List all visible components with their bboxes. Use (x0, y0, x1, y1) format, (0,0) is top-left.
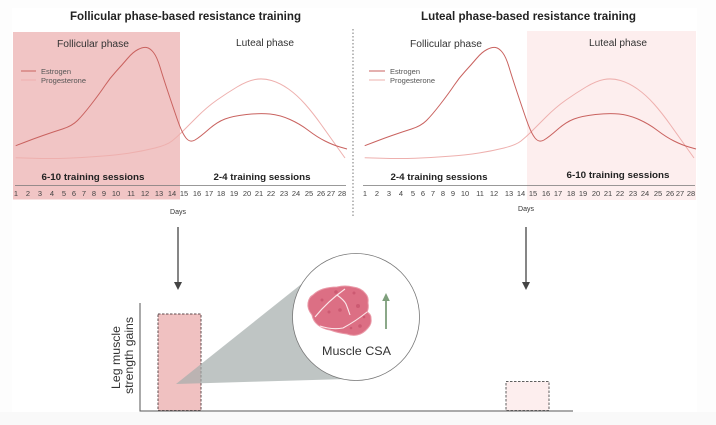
legend (21, 67, 86, 85)
day numbers: 4 (50, 189, 54, 198)
sessions label: 6-10: 6-10 training sessions (566, 170, 670, 181)
progesterone curve (365, 79, 694, 158)
day numbers: 25 (305, 189, 313, 198)
legend (369, 67, 435, 85)
day numbers: 19 (230, 189, 238, 198)
day numbers: 11 (127, 189, 135, 198)
day numbers: 15 (529, 189, 537, 198)
day numbers: 12 (490, 189, 498, 198)
day numbers: 9 (102, 189, 106, 198)
callout label: Muscle CSA (322, 344, 391, 358)
day numbers: 10 (461, 189, 469, 198)
day numbers: 24 (641, 189, 649, 198)
day numbers: 27 (327, 189, 335, 198)
day numbers: 24 (292, 189, 300, 198)
day numbers: 17 (205, 189, 213, 198)
panel divider (352, 29, 354, 218)
sessions label: 2-4: 2-4 training sessions (214, 172, 310, 183)
icon: up arrow (382, 293, 390, 329)
days axis label: Days (518, 206, 534, 213)
day numbers: 3 (38, 189, 42, 198)
day numbers: 8 (92, 189, 96, 198)
sessions label: 6-10: 6-10 training sessions (42, 172, 144, 183)
highlighted luteal phase band (527, 31, 696, 200)
day axis line (363, 184, 695, 186)
day numbers: 20 (243, 189, 251, 198)
sessions label: 2-4: 2-4 training sessions (390, 172, 488, 183)
day numbers: 6 (72, 189, 76, 198)
day numbers: 21 (255, 189, 263, 198)
bar chart: leg muscle strength gains (109, 303, 573, 411)
legend: Progesterone (390, 76, 435, 85)
estrogen curve (16, 47, 347, 149)
day numbers: 20 (592, 189, 600, 198)
phase label: follicular: Follicular phase (410, 39, 482, 50)
day numbers: 1 (14, 189, 18, 198)
day numbers: 25 (654, 189, 662, 198)
day numbers: 10 (112, 189, 120, 198)
days axis label: Days (170, 209, 186, 216)
axes (140, 303, 573, 411)
day numbers: 5 (62, 189, 66, 198)
bar: luteal (506, 382, 549, 410)
panel: follicular phase-based training (13, 9, 347, 216)
day numbers: 22 (267, 189, 275, 198)
day numbers: 19 (579, 189, 587, 198)
day numbers: 18 (567, 189, 575, 198)
day axis line (15, 184, 346, 186)
day numbers: 28 (687, 189, 695, 198)
day numbers: 1 (363, 189, 367, 198)
phase label: luteal: Luteal phase (236, 38, 294, 49)
panel: luteal phase-based training (363, 9, 696, 213)
day numbers: 16 (542, 189, 550, 198)
day numbers: 2 (26, 189, 30, 198)
day numbers: 8 (441, 189, 445, 198)
legend: Estrogen (41, 67, 71, 76)
callout circle (292, 254, 420, 380)
day numbers: 27 (676, 189, 684, 198)
icon: muscle cross-section (308, 286, 371, 335)
day numbers: 3 (387, 189, 391, 198)
day numbers: 14 (168, 189, 176, 198)
day numbers: 5 (411, 189, 415, 198)
day numbers: 18 (217, 189, 225, 198)
day numbers: 13 (155, 189, 163, 198)
day numbers: 12 (141, 189, 149, 198)
day numbers: 9 (451, 189, 455, 198)
day numbers: 17 (554, 189, 562, 198)
zoom cone (176, 282, 347, 384)
day numbers: 22 (616, 189, 624, 198)
progesterone curve (16, 79, 345, 158)
phase label: follicular: Follicular phase (57, 39, 129, 50)
callout: muscle CSA (292, 254, 420, 380)
panel title: follicular: Follicular phase-based resistance training (70, 9, 301, 23)
legend: Estrogen (390, 67, 420, 76)
bar: follicular (158, 314, 201, 410)
day numbers: 26 (666, 189, 674, 198)
legend: Progesterone (41, 76, 86, 85)
day numbers: 23 (280, 189, 288, 198)
day numbers: 7 (431, 189, 435, 198)
day numbers (363, 189, 695, 198)
estrogen curve (365, 47, 696, 149)
arrow: luteal to result (522, 227, 530, 290)
phase label: luteal: Luteal phase (589, 38, 647, 49)
day numbers: 28 (338, 189, 346, 198)
day numbers: 26 (317, 189, 325, 198)
panel title: luteal: Luteal phase-based resistance training (421, 9, 636, 23)
day numbers: 14 (517, 189, 525, 198)
day numbers: 4 (399, 189, 403, 198)
day numbers: 6 (421, 189, 425, 198)
arrow: follicular to result (174, 227, 182, 290)
y axis label line 2: strength gains (122, 317, 136, 394)
day numbers: 7 (82, 189, 86, 198)
day numbers: 21 (604, 189, 612, 198)
day numbers: 13 (505, 189, 513, 198)
highlighted follicular phase band (13, 32, 180, 200)
day numbers: 23 (629, 189, 637, 198)
y axis label: Leg muscle (109, 326, 123, 389)
day numbers: 11 (476, 189, 484, 198)
day numbers: 2 (375, 189, 379, 198)
day numbers: 15 (180, 189, 188, 198)
day numbers (14, 189, 346, 198)
day numbers: 16 (193, 189, 201, 198)
